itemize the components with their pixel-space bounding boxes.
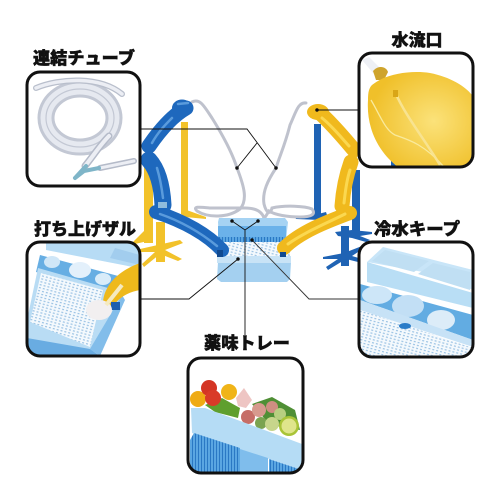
machine: yellow chute, right	[280, 104, 354, 257]
infographic canvas	[26, 31, 474, 474]
central tray	[217, 218, 291, 282]
panel: sieve	[27, 242, 140, 356]
callout lines	[140, 109, 359, 335]
machine: blue stand, right	[295, 124, 372, 270]
heading: cold water: 冷水キープ	[374, 219, 460, 239]
machine: yellow stand, left	[133, 122, 206, 267]
heading: sieve: 打ち上げザル	[34, 219, 136, 239]
machine: blue chute, left	[149, 100, 223, 257]
heading: condiment tray: 薬味トレー	[204, 333, 290, 353]
heading: water outlet: 水流口	[392, 30, 442, 50]
panel: water outlet	[359, 53, 474, 170]
food: vegetables and garnish	[190, 380, 300, 436]
panel: condiment tray	[188, 358, 303, 473]
panel: cold water	[359, 242, 473, 357]
heading: tube: 連結チューブ	[33, 48, 135, 68]
panel: tube	[27, 72, 140, 186]
silicone tubes	[192, 101, 314, 219]
